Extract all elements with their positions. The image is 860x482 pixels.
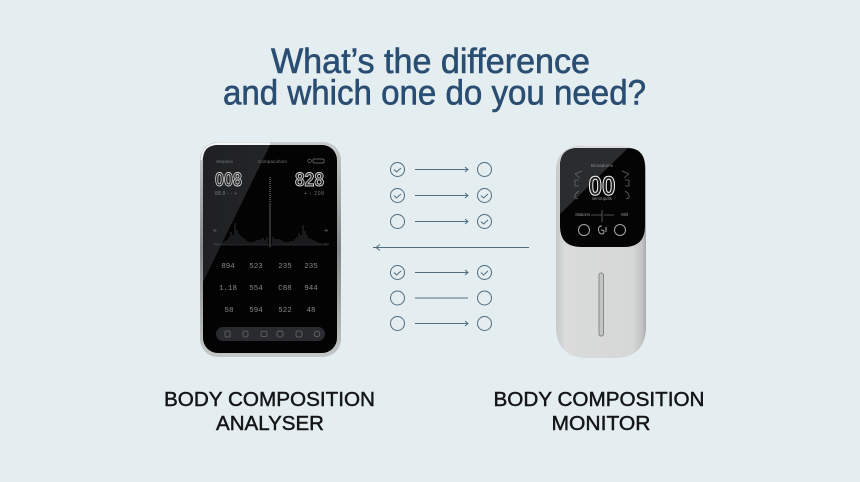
analyser data grid: 235: [278, 263, 292, 271]
row 3: [390, 214, 492, 228]
analyser data grid: 523: [249, 263, 263, 271]
title: [223, 42, 646, 112]
label: analyser: ANALYSER: [216, 413, 324, 435]
analyser data grid: 58: [224, 307, 234, 315]
analyser data grid: 235: [304, 263, 318, 271]
analyser bottom nav bar: [216, 327, 325, 341]
analyser data grid: 944: [304, 285, 318, 293]
analyser data grid: [219, 263, 318, 315]
analyser data grid: 1.18: [219, 285, 237, 293]
device: body composition monitor: [556, 145, 646, 358]
device: body composition analyser: [200, 142, 341, 357]
monitor screen: [560, 148, 645, 247]
row 2: [390, 188, 492, 202]
analyser data grid: 894: [221, 263, 235, 271]
label: monitor: BODY COMPOSITION: [494, 389, 704, 411]
long return arrow: [373, 244, 529, 250]
row 1: [390, 162, 492, 176]
analyser data grid: 522: [278, 307, 292, 315]
analyser screen: + ⁝ 208: [304, 191, 324, 197]
analyser status bar: [216, 159, 324, 164]
analyser data grid: C88: [278, 285, 292, 293]
analyser top readouts: [215, 170, 324, 191]
arrows and comparison checks: [373, 162, 529, 330]
monitor buttons: [578, 224, 626, 236]
label: analyser: [164, 389, 375, 435]
monitor side marks: [575, 171, 629, 222]
title: What’s the difference: [271, 42, 590, 81]
analyser data grid: 554: [249, 285, 263, 293]
analyser waveform chart: [213, 177, 329, 247]
monitor screen labels: [575, 163, 629, 217]
monitor screen labels: Bioradoms: [591, 163, 614, 168]
monitor screen labels: ilemrupdts: [592, 196, 613, 201]
monitor digits: 00: [588, 171, 616, 201]
analyser screen: 88.8 ◦ - +: [215, 191, 237, 197]
analyser top readouts: 828: [295, 170, 324, 191]
analyser status bar: Compacultion: [258, 159, 287, 164]
label: monitor: MONITOR: [552, 413, 650, 435]
monitor screen labels: Wlit: [621, 212, 629, 217]
label: analyser: BODY COMPOSITION: [164, 389, 375, 411]
title: and which one do you need?: [223, 74, 646, 112]
analyser status bar: Stepses: [216, 159, 234, 164]
monitor slot: [599, 273, 604, 336]
analyser top readouts: 008: [215, 170, 242, 191]
analyser data grid: 594: [249, 307, 263, 315]
row 5: [390, 291, 492, 305]
row 6: [390, 316, 492, 330]
monitor screen labels: Stations: [575, 212, 591, 217]
analyser data grid: 48: [306, 307, 316, 315]
analyser screen: [203, 145, 337, 353]
row 4: [390, 266, 492, 280]
label: monitor: [494, 389, 704, 435]
